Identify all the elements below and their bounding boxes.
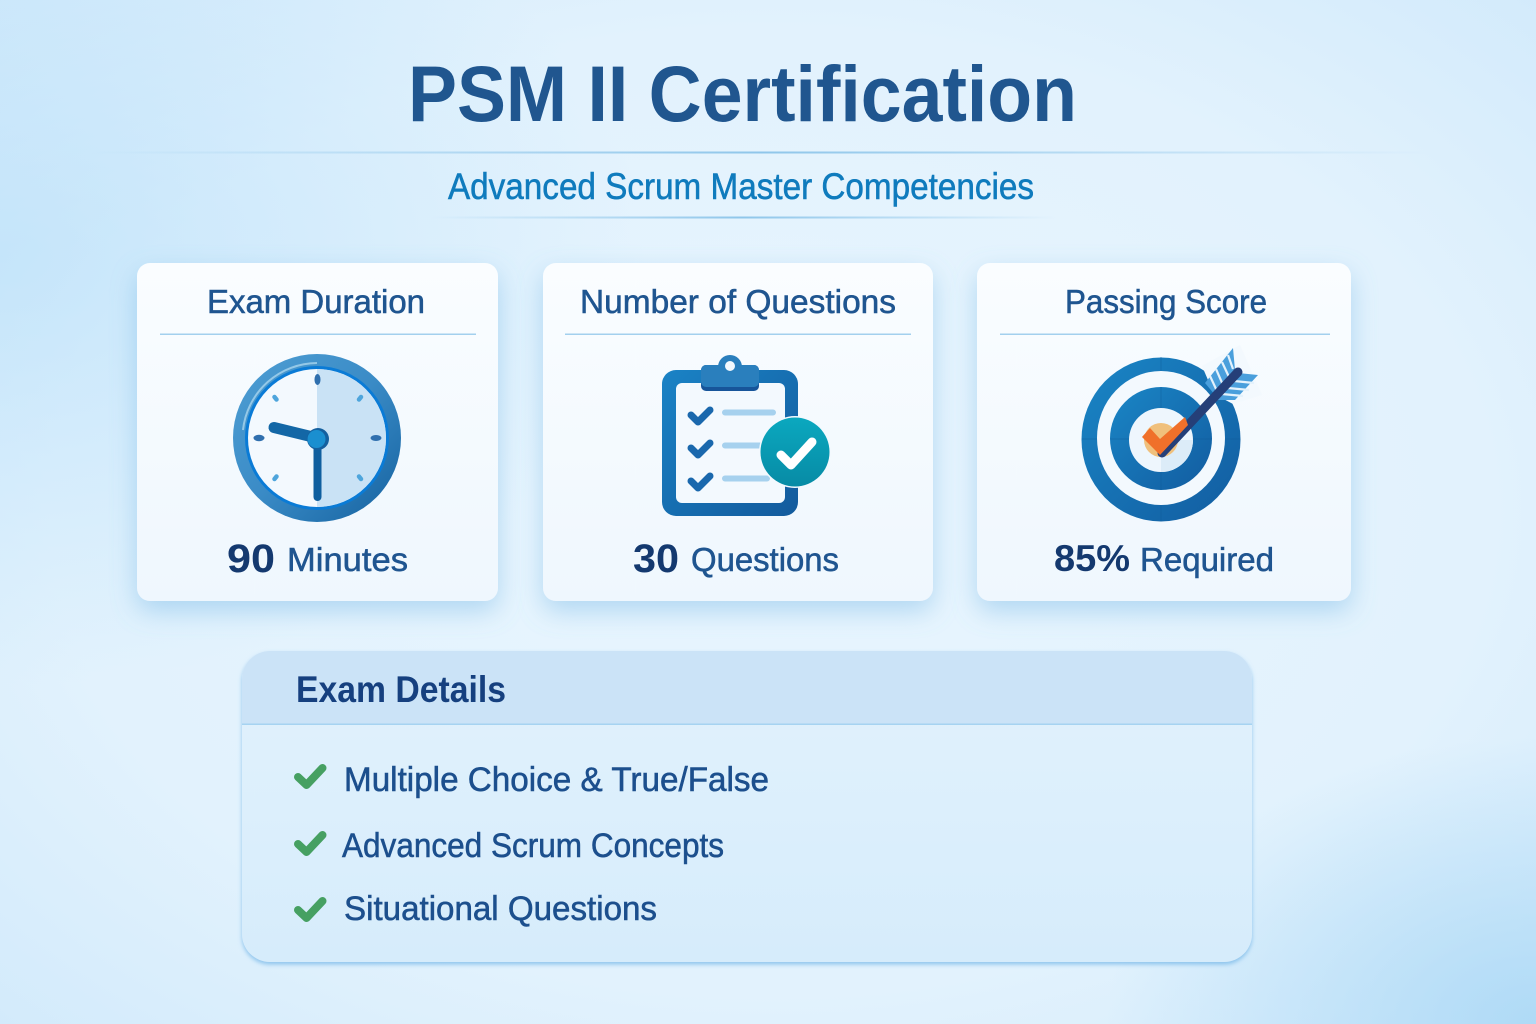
subtitle: Advanced Scrum Master Competencies bbox=[448, 166, 1034, 207]
panel: passing score bbox=[977, 263, 1351, 601]
icon: clock bbox=[233, 354, 401, 522]
subtitle divider bbox=[430, 216, 1055, 218]
panel: passing score: Required bbox=[1140, 541, 1274, 578]
title: PSM II Certification bbox=[408, 49, 1077, 138]
panel: number of questions bbox=[543, 263, 933, 601]
title divider bbox=[90, 152, 1430, 154]
icon: clipboard bbox=[662, 355, 831, 516]
list item: multiple choice: Multiple Choice & True/False bbox=[344, 761, 769, 799]
heading: number of questions: Number of Questions bbox=[580, 283, 896, 320]
heading: exam duration: Exam Duration bbox=[207, 283, 425, 320]
panel: number of questions: Questions bbox=[691, 541, 839, 578]
value: 90 minutes: 90 bbox=[227, 537, 275, 581]
panel: exam duration: Minutes bbox=[287, 541, 408, 578]
value: 30 questions: 30 bbox=[633, 537, 679, 581]
list item: advanced scrum concepts: Advanced Scrum Concepts bbox=[342, 827, 724, 865]
heading: exam details: Exam Details bbox=[296, 669, 506, 710]
value: 85 percent required: 85% bbox=[1054, 538, 1130, 579]
heading: passing score: Passing Score bbox=[1065, 283, 1267, 320]
icon: target with arrow bbox=[1082, 345, 1262, 522]
panel: exam details bbox=[242, 651, 1252, 962]
list item: situational questions: Situational Questions bbox=[344, 890, 657, 928]
panel: exam duration bbox=[137, 263, 498, 601]
panel header band bbox=[242, 651, 1252, 725]
